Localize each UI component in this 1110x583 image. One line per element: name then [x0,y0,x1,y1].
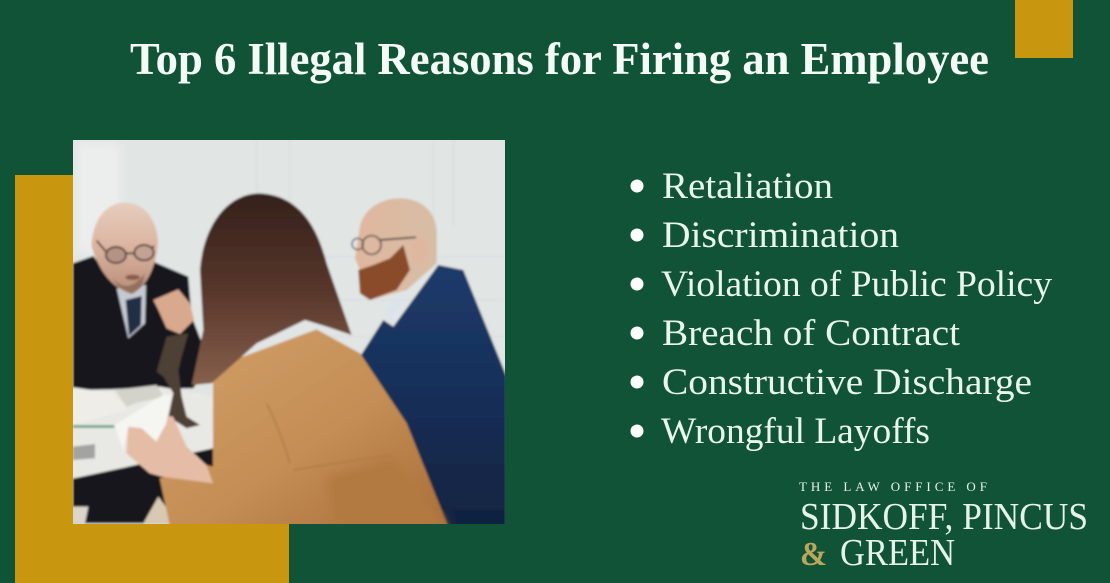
title: Top 6 Illegal Reasons for Firing an Employee [130,34,989,84]
logo ampersand: & [800,536,827,573]
desk and book [112,384,171,391]
right man: collar [396,300,402,301]
left man: shirt and tie [117,285,146,338]
right man: ear [412,237,428,263]
woman: hair [192,193,352,385]
logo line: firm name: SIDKOFF, PINCUS [800,496,1088,538]
item: Constructive Discharge: Constructive Discharge [662,362,1032,403]
logo line: the law office of: THE LAW OFFICE OF [799,479,987,494]
accent: gold L-shape behind photo [15,175,289,583]
left man: suit [73,256,210,390]
right man: suit [360,265,507,527]
photo: three people meeting at a desk [73,140,505,524]
bullet list: illegal reasons [630,166,1053,452]
woman: jacket [160,329,448,527]
right man: beard [358,245,410,300]
wall [73,140,505,524]
left man: head [91,203,158,294]
left man: hands [153,289,194,334]
paper held by woman [115,395,171,450]
item: Discrimination: Discrimination [662,215,899,256]
right man: glasses [352,238,363,250]
right man: head [355,198,437,300]
lady justice statue [157,333,200,428]
logo line: green: GREEN [840,532,955,574]
accent: gold corner block top right [1015,0,1073,58]
left man: glasses [97,241,154,253]
item: Breach of Contract: Breach of Contract [662,313,961,354]
item: Retaliation: Retaliation [662,166,833,207]
item: Violation of Public Policy: Violation of Public Policy [661,264,1053,305]
woman: hand [126,413,213,483]
item: Wrongful Layoffs: Wrongful Layoffs [661,411,930,452]
logo: law office wordmark [799,479,1088,574]
